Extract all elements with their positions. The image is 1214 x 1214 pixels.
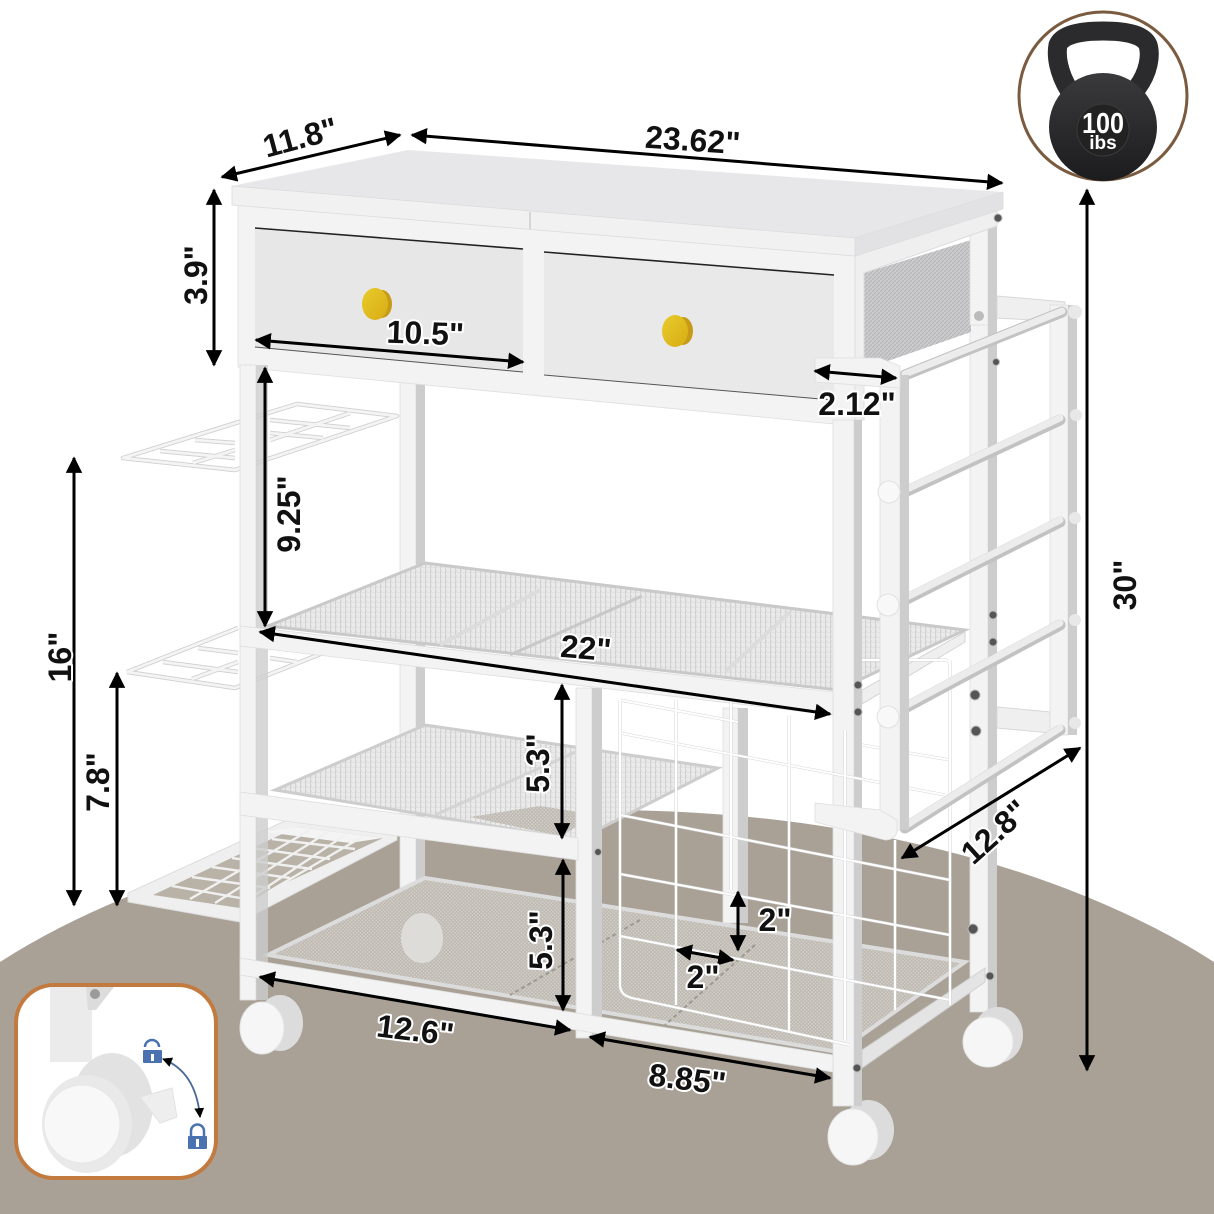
- label: 8.85: 8.85": [647, 1056, 728, 1102]
- rack: middle: [127, 628, 323, 688]
- label: 7.8: 7.8": [80, 752, 116, 812]
- arrow: width: [412, 135, 1002, 183]
- arrow: bottom left width: [260, 977, 570, 1030]
- drawer: left: [255, 228, 523, 372]
- weight text: 100: [1082, 108, 1124, 140]
- arrow: bar depth: [815, 371, 896, 378]
- floor backdrop: [0, 810, 1214, 1214]
- back legs: [400, 215, 997, 1012]
- ladder: lower bracket: [815, 803, 897, 840]
- caster post: [50, 987, 114, 1062]
- knob: right: [662, 315, 693, 347]
- arrow: shelf width: [260, 632, 830, 714]
- label: 2 vertical: 2": [759, 902, 791, 938]
- dimension labels: [42, 110, 1143, 1102]
- leg: front right: [833, 420, 862, 1106]
- label: 2.12: 2.12": [818, 386, 896, 422]
- unit text: ibs: [1089, 133, 1117, 154]
- icon: locked padlock: [188, 1124, 207, 1149]
- wire side racks: [123, 404, 397, 922]
- kettlebell: [1049, 31, 1157, 181]
- arrow: middle clearance: [560, 685, 564, 838]
- dimension arrows: [74, 135, 1087, 1078]
- arrow: drawer height: [212, 190, 216, 365]
- caster wheel: [42, 1053, 177, 1173]
- label: 2 horizontal: 2": [687, 959, 719, 995]
- side upper rail: [855, 210, 997, 420]
- beam: upper shelf: [240, 626, 833, 715]
- label: 16: 16": [42, 632, 78, 682]
- label: 9.25: 9.25": [271, 475, 307, 553]
- ladder: top bar: [905, 311, 1062, 375]
- towel ladder: [815, 296, 1082, 840]
- label: 12.8: 12.8": [954, 793, 1035, 871]
- product: rolling cart: [123, 150, 1082, 1165]
- shelf: middle mesh: [275, 725, 718, 840]
- inset: locking caster: [16, 985, 216, 1178]
- label: 5.3 lower: 5.3": [523, 910, 559, 970]
- casters: [240, 995, 1023, 1165]
- ladder: rear post: [1050, 305, 1082, 735]
- wire basket: [620, 660, 950, 1045]
- arrow: bottom right width: [590, 1037, 830, 1078]
- beam: middle shelf: [240, 792, 578, 860]
- leg: front left: [240, 365, 268, 1000]
- shelf: upper mesh: [268, 563, 965, 690]
- ladder: front post: [880, 375, 909, 830]
- shelf: bottom mesh: [268, 878, 965, 1052]
- arrow: grid width: [677, 950, 733, 960]
- arrow: ladder length: [902, 748, 1080, 858]
- arrow: total height: [1086, 190, 1088, 1070]
- rack: lower plate: [128, 820, 397, 922]
- label: 11.8: 11.8": [259, 110, 341, 165]
- badge ring: [1019, 12, 1187, 180]
- icon: lock arrow: [163, 1059, 200, 1117]
- arrow: upper clearance: [264, 368, 266, 626]
- arrow: rack 7.8: [116, 673, 118, 905]
- right frame post top: [970, 215, 997, 325]
- caster: back right: [963, 1007, 1023, 1067]
- knob: left: [362, 288, 392, 320]
- badge: 100 lbs capacity: [1019, 12, 1187, 181]
- side rail: bottom shelf: [862, 968, 985, 1068]
- label: 12.6: 12.6": [375, 1007, 456, 1053]
- arrow: lower clearance: [562, 860, 564, 1010]
- side mesh panel: [864, 240, 971, 362]
- label: 30: 30": [1107, 560, 1143, 610]
- beam: bottom shelf: [240, 958, 833, 1072]
- leg: back right: [970, 215, 997, 1012]
- ladder: rear mount rail: [997, 296, 1065, 733]
- frame bolts: [594, 214, 1002, 1072]
- ladder: rungs: [905, 418, 1060, 828]
- centre divider: [576, 688, 602, 1038]
- rack: upper: [123, 404, 397, 470]
- arrow: drawer width: [256, 340, 523, 362]
- label: 5.3 upper: 5.3": [520, 733, 556, 793]
- tabletop: [232, 150, 1003, 256]
- ladder: knobs: [877, 481, 900, 728]
- leg: back left: [400, 380, 425, 925]
- label: 23.62: 23.62": [644, 119, 742, 161]
- weight plate: [1077, 104, 1129, 156]
- caster: front left: [240, 995, 303, 1054]
- label: 22: 22": [559, 628, 613, 668]
- drawer section: [232, 150, 1003, 426]
- arrow: rack 16: [72, 458, 76, 905]
- ladder: upper bracket: [815, 358, 900, 388]
- caster: front right: [828, 1100, 894, 1165]
- side rail: upper shelf: [862, 632, 965, 704]
- label: 3.9: 3.9": [178, 245, 214, 305]
- leg: back centre: [723, 708, 748, 923]
- label: 10.5: 10.5": [386, 314, 465, 352]
- arrow: grid height: [736, 892, 740, 950]
- front frame panel: [238, 205, 855, 426]
- arrow: depth: [222, 135, 400, 177]
- inset frame: [16, 985, 216, 1178]
- drawer: right: [544, 252, 834, 400]
- front frame: [240, 214, 1002, 1106]
- icon: unlocked padlock: [143, 1040, 162, 1063]
